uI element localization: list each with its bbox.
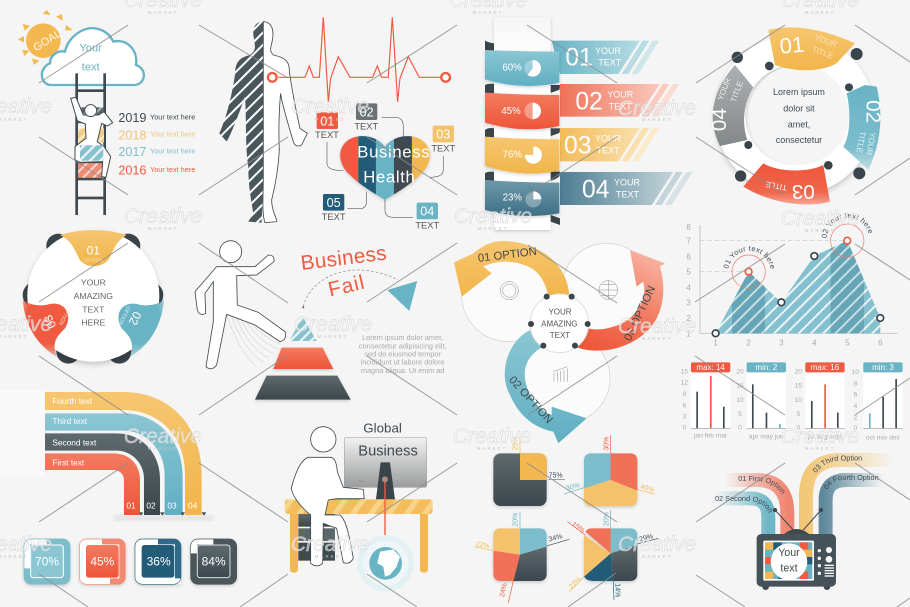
pie labels 20 34 24 22: 20% <box>513 513 520 527</box>
lobe 01: 01 <box>87 243 100 257</box>
watermarks: Creative <box>291 533 369 556</box>
ribbon 60%: 60% <box>502 63 522 74</box>
lorem paragraph: magna aliqua. Ut enim ad <box>361 366 444 375</box>
bar chart max 14 <box>681 362 730 440</box>
watermark market labels: MARKET <box>478 226 508 231</box>
lobe 03 <box>23 300 71 357</box>
axis labels: 8 <box>686 223 691 232</box>
axis labels: 2 <box>686 314 691 323</box>
bar chart max 16: jul aug sept <box>807 434 842 441</box>
ribbon 23% <box>485 180 559 216</box>
band fourth <box>45 392 202 515</box>
timeline list: Your text here <box>150 130 195 139</box>
tv screen: Your <box>778 547 800 559</box>
lorem paragraph: consectetur adipisicing elit, <box>359 341 446 350</box>
lobe center text: YOUR <box>81 278 106 288</box>
band third <box>45 413 183 515</box>
panel: rainbow bands <box>0 390 213 521</box>
heartbeat line <box>268 17 450 102</box>
segment 04 <box>708 65 753 146</box>
peak text 02: 02 Your text here <box>822 213 872 238</box>
rainbow shadow <box>113 515 213 521</box>
arrow 03: 03 OPTION <box>622 284 658 343</box>
ribbon 45%: 45% <box>501 106 521 117</box>
watermarks: Creative <box>618 97 696 120</box>
axis labels: 5 <box>686 268 691 277</box>
arrow 01: 01 OPTION <box>477 246 537 265</box>
teal step box <box>80 145 103 161</box>
label 04 <box>415 203 440 231</box>
ladder <box>75 73 106 215</box>
axis labels: 4 <box>686 283 691 292</box>
band 04: TEXT <box>616 189 639 199</box>
bar chart min 2: apr may jun <box>749 434 784 441</box>
lobe white disc <box>27 230 159 362</box>
bar chart max 14: 12 <box>681 380 688 387</box>
white left fade <box>0 390 45 477</box>
watermark market labels: MARKET <box>805 446 835 451</box>
segment 02: 02 <box>862 100 885 123</box>
label 04: TEXT <box>415 221 440 231</box>
band first: 01 <box>126 501 136 511</box>
bar chart min 3: 8 <box>853 380 857 387</box>
band first: First text <box>52 458 85 468</box>
watermark market labels: MARKET <box>148 226 178 231</box>
peak labels <box>732 224 864 288</box>
flying pyramid tip <box>387 281 417 311</box>
bar chart min 3: 10 <box>852 369 859 376</box>
bar chart max 16: 20 <box>795 369 802 376</box>
band second <box>45 433 160 515</box>
tile 36% <box>135 539 181 584</box>
band 03: 03 <box>564 132 591 159</box>
band 01 <box>552 41 659 74</box>
tile 84%: 84% <box>202 555 226 569</box>
bar chart min 3 <box>852 362 903 441</box>
watermark market labels: MARKET <box>318 334 348 339</box>
segment 02 <box>843 85 885 170</box>
kick motion lines <box>227 315 281 367</box>
panel: square pies <box>474 435 658 603</box>
lorem paragraph: incididunt ut labore dolore <box>361 358 445 367</box>
bar chart min 2: 0 <box>738 424 742 431</box>
timeline list: 2019 <box>118 111 146 125</box>
arrows hub: AMAZING <box>541 319 578 328</box>
bar chart max 14: 15 <box>681 369 688 376</box>
timeline list: Your text here <box>150 146 195 155</box>
monitor: Business <box>358 444 418 460</box>
band 04 <box>560 172 693 205</box>
segment 01: TITLE <box>811 45 834 61</box>
timeline list: Your text here <box>150 112 195 121</box>
icon: sun goal <box>18 10 73 65</box>
band 02: YOUR <box>607 90 634 100</box>
segment 03: 03 <box>792 180 815 203</box>
option arc 03 <box>806 460 893 535</box>
axis labels: 4 <box>812 339 817 348</box>
ring center text: Lorem ipsum <box>773 87 825 97</box>
ribbon 23%: 23% <box>503 193 522 204</box>
heart <box>339 136 431 202</box>
pie labels 30 40 30: 40% <box>639 483 655 494</box>
tv screen <box>763 541 814 581</box>
option labels <box>715 455 878 513</box>
bar chart min 3: 6 <box>853 392 857 399</box>
lobe 02: OPTION <box>116 305 131 326</box>
watermarks: Creative <box>618 315 696 338</box>
timeline list: 2017 <box>118 145 146 159</box>
bar chart min 3: min: 3 <box>872 363 894 372</box>
watermarks: Creative <box>618 533 696 556</box>
timeline list: 2018 <box>118 128 146 142</box>
watermark market labels: MARKET <box>805 228 835 233</box>
label 03: 03 <box>436 128 450 142</box>
lobe center text: TEXT <box>82 304 105 314</box>
arrows hub: TEXT <box>550 331 570 340</box>
watermarks: Creative <box>294 313 372 336</box>
pie labels 30 40 30: 30% <box>565 482 581 493</box>
pie 20 34 24 22 <box>493 528 547 581</box>
pie 75% 25% <box>493 437 565 506</box>
watermark market labels: MARKET <box>642 554 672 559</box>
watermark market labels: MARKET <box>805 10 835 15</box>
dashed arc arrow <box>302 270 398 308</box>
axis labels: 1 <box>686 329 691 338</box>
band 02: TEXT <box>609 101 632 111</box>
lobe center text <box>74 278 113 328</box>
bar chart min 2: 10 <box>736 397 744 404</box>
pie 75% 25%: 75% <box>549 472 563 479</box>
label 02: TEXT <box>354 122 379 132</box>
icon: cloud: Your <box>80 43 102 55</box>
watermarks: Creative <box>781 207 859 230</box>
label 01: TEXT <box>315 130 339 140</box>
pie labels 20 29 14 22 15: 15% <box>570 521 586 535</box>
panel: area chart <box>686 213 898 348</box>
band 03: YOUR <box>595 134 621 144</box>
band end tips <box>139 512 206 516</box>
cable <box>381 476 389 550</box>
lorem paragraph: Lorem ipsum dolor amet, <box>362 333 443 342</box>
icon: globe <box>357 535 414 592</box>
panel: bar charts <box>681 362 903 441</box>
watermarks: Creative <box>291 95 369 118</box>
bar chart max 14: 6 <box>682 402 686 409</box>
lobe 02: 02 <box>126 309 144 328</box>
body silhouette <box>219 22 307 223</box>
pie labels 30 40 30: 30% <box>603 437 610 451</box>
segment 03: TITLE <box>765 179 788 192</box>
segment 01 <box>768 27 855 70</box>
pyramid <box>255 317 351 400</box>
ring knobs <box>732 48 865 182</box>
ribbon 45% <box>485 93 559 129</box>
arrows hub: YOUR <box>548 307 572 316</box>
watermark market labels: MARKET <box>642 117 672 122</box>
watermarks: Creative <box>453 425 531 448</box>
panel: circular arrows <box>454 241 665 443</box>
books <box>298 514 335 561</box>
bar chart min 3: 4 <box>853 403 857 410</box>
band 03 <box>560 128 659 161</box>
tile 70%: 70% <box>35 555 59 569</box>
tile 45% <box>79 539 125 584</box>
watermark market labels: MARKET <box>148 10 178 15</box>
tv body <box>757 534 836 590</box>
inner circle <box>749 65 849 165</box>
business fail title <box>299 242 388 302</box>
option labels: 04 Fourth Option <box>824 474 878 489</box>
label 03 <box>431 126 456 154</box>
panel: tv options <box>715 453 888 590</box>
label 02: 02 <box>360 105 374 119</box>
ring center text: amet, <box>788 119 810 129</box>
connector lines <box>327 117 443 217</box>
option arc 04 <box>826 480 883 535</box>
segment 01: 01 <box>779 32 805 59</box>
bar chart min 2: 5 <box>738 411 742 418</box>
label 04: 04 <box>420 205 434 219</box>
bar chart min 3: oct nov dec <box>866 434 901 441</box>
panel: segmented ring <box>708 27 885 205</box>
ring <box>730 50 860 180</box>
band 01: YOUR <box>595 46 621 56</box>
monitor: ... <box>358 478 364 484</box>
segment 04: TITLE <box>729 80 745 104</box>
lobe 01 <box>60 230 127 266</box>
tile 45%: 45% <box>90 555 115 569</box>
kicking figure <box>195 241 286 369</box>
bar chart max 14: jan feb mar <box>693 433 728 440</box>
bar chart max 16: 0 <box>796 424 800 431</box>
option arc 02 <box>717 498 768 535</box>
lobe 03: 03 <box>41 312 59 331</box>
watermark market labels: MARKET <box>315 554 345 559</box>
ring center text: consectetur <box>776 135 822 145</box>
band 01: TEXT <box>598 57 622 67</box>
arrow 01 <box>454 241 569 297</box>
icon: cloud: text <box>82 62 100 74</box>
pie 20 29 14 22 15 <box>584 528 637 581</box>
panel: business health <box>219 17 456 231</box>
lobe center text: AMAZING <box>74 291 113 301</box>
band 03: TEXT <box>597 145 620 155</box>
tv screen: text <box>780 563 798 575</box>
pie labels 20 29 14 22 15: 20% <box>603 512 610 526</box>
heart: Business <box>357 142 430 161</box>
ribbon 60% <box>485 50 559 86</box>
pie labels 30 40 30 <box>564 435 655 494</box>
bar chart min 3: 0 <box>853 425 857 432</box>
tile 84% <box>191 539 237 584</box>
climbing figure <box>71 97 113 177</box>
ribbon 76%: 76% <box>503 149 522 160</box>
segment 02: YOUR <box>864 132 877 156</box>
lorem paragraph: sed do eiusmod tempor <box>364 349 441 358</box>
band first <box>45 453 140 515</box>
watermark market labels: MARKET <box>477 446 507 451</box>
band third: Third text <box>52 416 88 426</box>
panel: percent tiles <box>24 539 237 584</box>
pie labels 20 29 14 22 15: 14% <box>614 583 621 597</box>
timeline list: Your text here <box>150 165 195 174</box>
band 01: 01 <box>565 44 593 71</box>
bar chart max 16 <box>795 362 845 441</box>
desk <box>285 497 433 573</box>
arrow 03 <box>575 250 665 351</box>
ring center text <box>773 87 825 145</box>
pie 75% 25%: 25% <box>513 437 520 451</box>
label 02 <box>354 103 379 132</box>
label 03: TEXT <box>431 144 456 154</box>
panel: goal ladder <box>18 10 195 215</box>
area <box>718 242 880 334</box>
axis labels: 6 <box>878 339 883 348</box>
option labels: 01 First Option <box>738 476 784 494</box>
lobe knobs <box>23 234 163 364</box>
label 01: 01 <box>320 114 334 128</box>
panel: business fail <box>195 241 446 400</box>
pie 30 40 30 <box>584 453 637 506</box>
lobe 01: OPTION <box>83 258 104 264</box>
bar chart max 16: max: 16 <box>811 363 840 372</box>
ribbon curls <box>485 41 560 225</box>
pie labels 20 34 24 22: 22% <box>475 541 490 550</box>
option labels: 02 Second Option <box>715 496 772 513</box>
band 04: YOUR <box>614 177 640 187</box>
option labels: 03 Third Option <box>812 455 862 472</box>
axis labels: 2 <box>746 339 751 348</box>
global title: Global <box>363 420 402 435</box>
data points <box>712 237 884 337</box>
pie labels 20 29 14 22 15 <box>567 510 658 600</box>
bar chart min 2: 20 <box>736 369 744 376</box>
axis labels: 1 <box>713 339 718 348</box>
axis labels: 3 <box>686 299 691 308</box>
band third: 03 <box>167 501 177 511</box>
segment 04: YOUR <box>716 77 733 102</box>
thin outer circles <box>462 243 652 423</box>
lobe 03: OPTION <box>57 305 71 326</box>
business fail title: Fail <box>326 271 367 302</box>
pie labels 20 29 14 22 15: 29% <box>639 533 654 544</box>
band 02: 02 <box>575 88 603 115</box>
lorem paragraph <box>359 333 446 375</box>
watermarks: Creative <box>124 205 202 228</box>
band second: 02 <box>146 501 156 511</box>
axis labels <box>686 223 883 348</box>
panel: global business desk <box>285 420 433 592</box>
axis labels: 3 <box>779 339 784 348</box>
pie labels 20 34 24 22: 34% <box>548 533 563 544</box>
option arc 01 <box>727 480 787 535</box>
pie labels 20 34 24 22 <box>474 512 569 603</box>
heart: Health <box>363 167 415 186</box>
axis labels: 6 <box>686 252 691 261</box>
bar chart max 16: 5 <box>796 411 800 418</box>
icon: cloud <box>42 28 144 85</box>
lobe center text: HERE <box>81 318 106 328</box>
axis labels: 5 <box>845 339 850 348</box>
ribbon 76% <box>485 137 559 174</box>
tv controls <box>818 547 834 577</box>
bar chart min 2: 15 <box>736 383 744 390</box>
tile 70% <box>24 539 70 584</box>
bar chart max 14: max: 14 <box>696 363 725 372</box>
arrow 02 <box>505 330 587 443</box>
bar chart max 14: 9 <box>682 391 686 398</box>
watermarks: Creative <box>124 425 202 448</box>
antenna <box>773 508 823 534</box>
bar chart max 14: 0 <box>682 424 686 431</box>
axes <box>700 225 897 333</box>
band 02 <box>560 84 679 117</box>
bar chart max 16: 10 <box>795 397 802 404</box>
band fourth: 04 <box>188 501 198 511</box>
monitor <box>344 437 427 499</box>
option icons <box>500 281 618 382</box>
band 04: 04 <box>582 176 609 203</box>
watermark market labels: MARKET <box>473 10 503 15</box>
band second: Second text <box>52 437 97 447</box>
watermark market labels: MARKET <box>148 446 178 451</box>
panel: ribbon percentages <box>485 17 693 230</box>
icon: sun goal: GOAL <box>31 28 64 54</box>
pie labels 20 34 24 22: 24% <box>499 583 509 598</box>
bar chart min 2: min: 2 <box>755 363 778 372</box>
ring center text: dolor sit <box>783 103 815 113</box>
axis labels: 7 <box>686 237 691 246</box>
seated figure <box>291 427 364 566</box>
tile 36%: 36% <box>147 555 171 569</box>
watermark market labels: MARKET <box>642 336 672 341</box>
segment 04: 04 <box>708 108 731 131</box>
white band <box>494 17 551 230</box>
business fail title: Business <box>299 242 388 275</box>
watermark market labels: MARKET <box>315 117 345 122</box>
bar chart min 2 <box>736 362 786 441</box>
arrows hub <box>528 294 591 353</box>
segment 03 <box>743 163 830 205</box>
segment 02: TITLE <box>854 131 867 154</box>
lobe 02 <box>116 300 164 357</box>
label 01 <box>315 112 339 140</box>
watermarks: Creative <box>454 205 532 228</box>
peak text 01: 01 Your text here <box>724 246 774 269</box>
panel: three lobe circle <box>23 230 164 364</box>
arrow 02: 02 OPTION <box>506 374 555 426</box>
bar chart max 16: 15 <box>795 383 802 390</box>
label 05 <box>322 194 346 222</box>
watermarks: Creative <box>781 425 859 448</box>
bar chart min 3: 2 <box>853 414 857 421</box>
segment 01: YOUR <box>813 33 838 49</box>
pie labels 20 29 14 22 15: 22% <box>568 576 583 591</box>
band fourth: Fourth text <box>52 396 93 406</box>
bar chart max 14: 3 <box>682 414 686 421</box>
label 05: TEXT <box>322 212 346 222</box>
timeline list: 2016 <box>118 164 146 178</box>
label 05: 05 <box>327 196 341 210</box>
timeline list <box>118 111 195 178</box>
